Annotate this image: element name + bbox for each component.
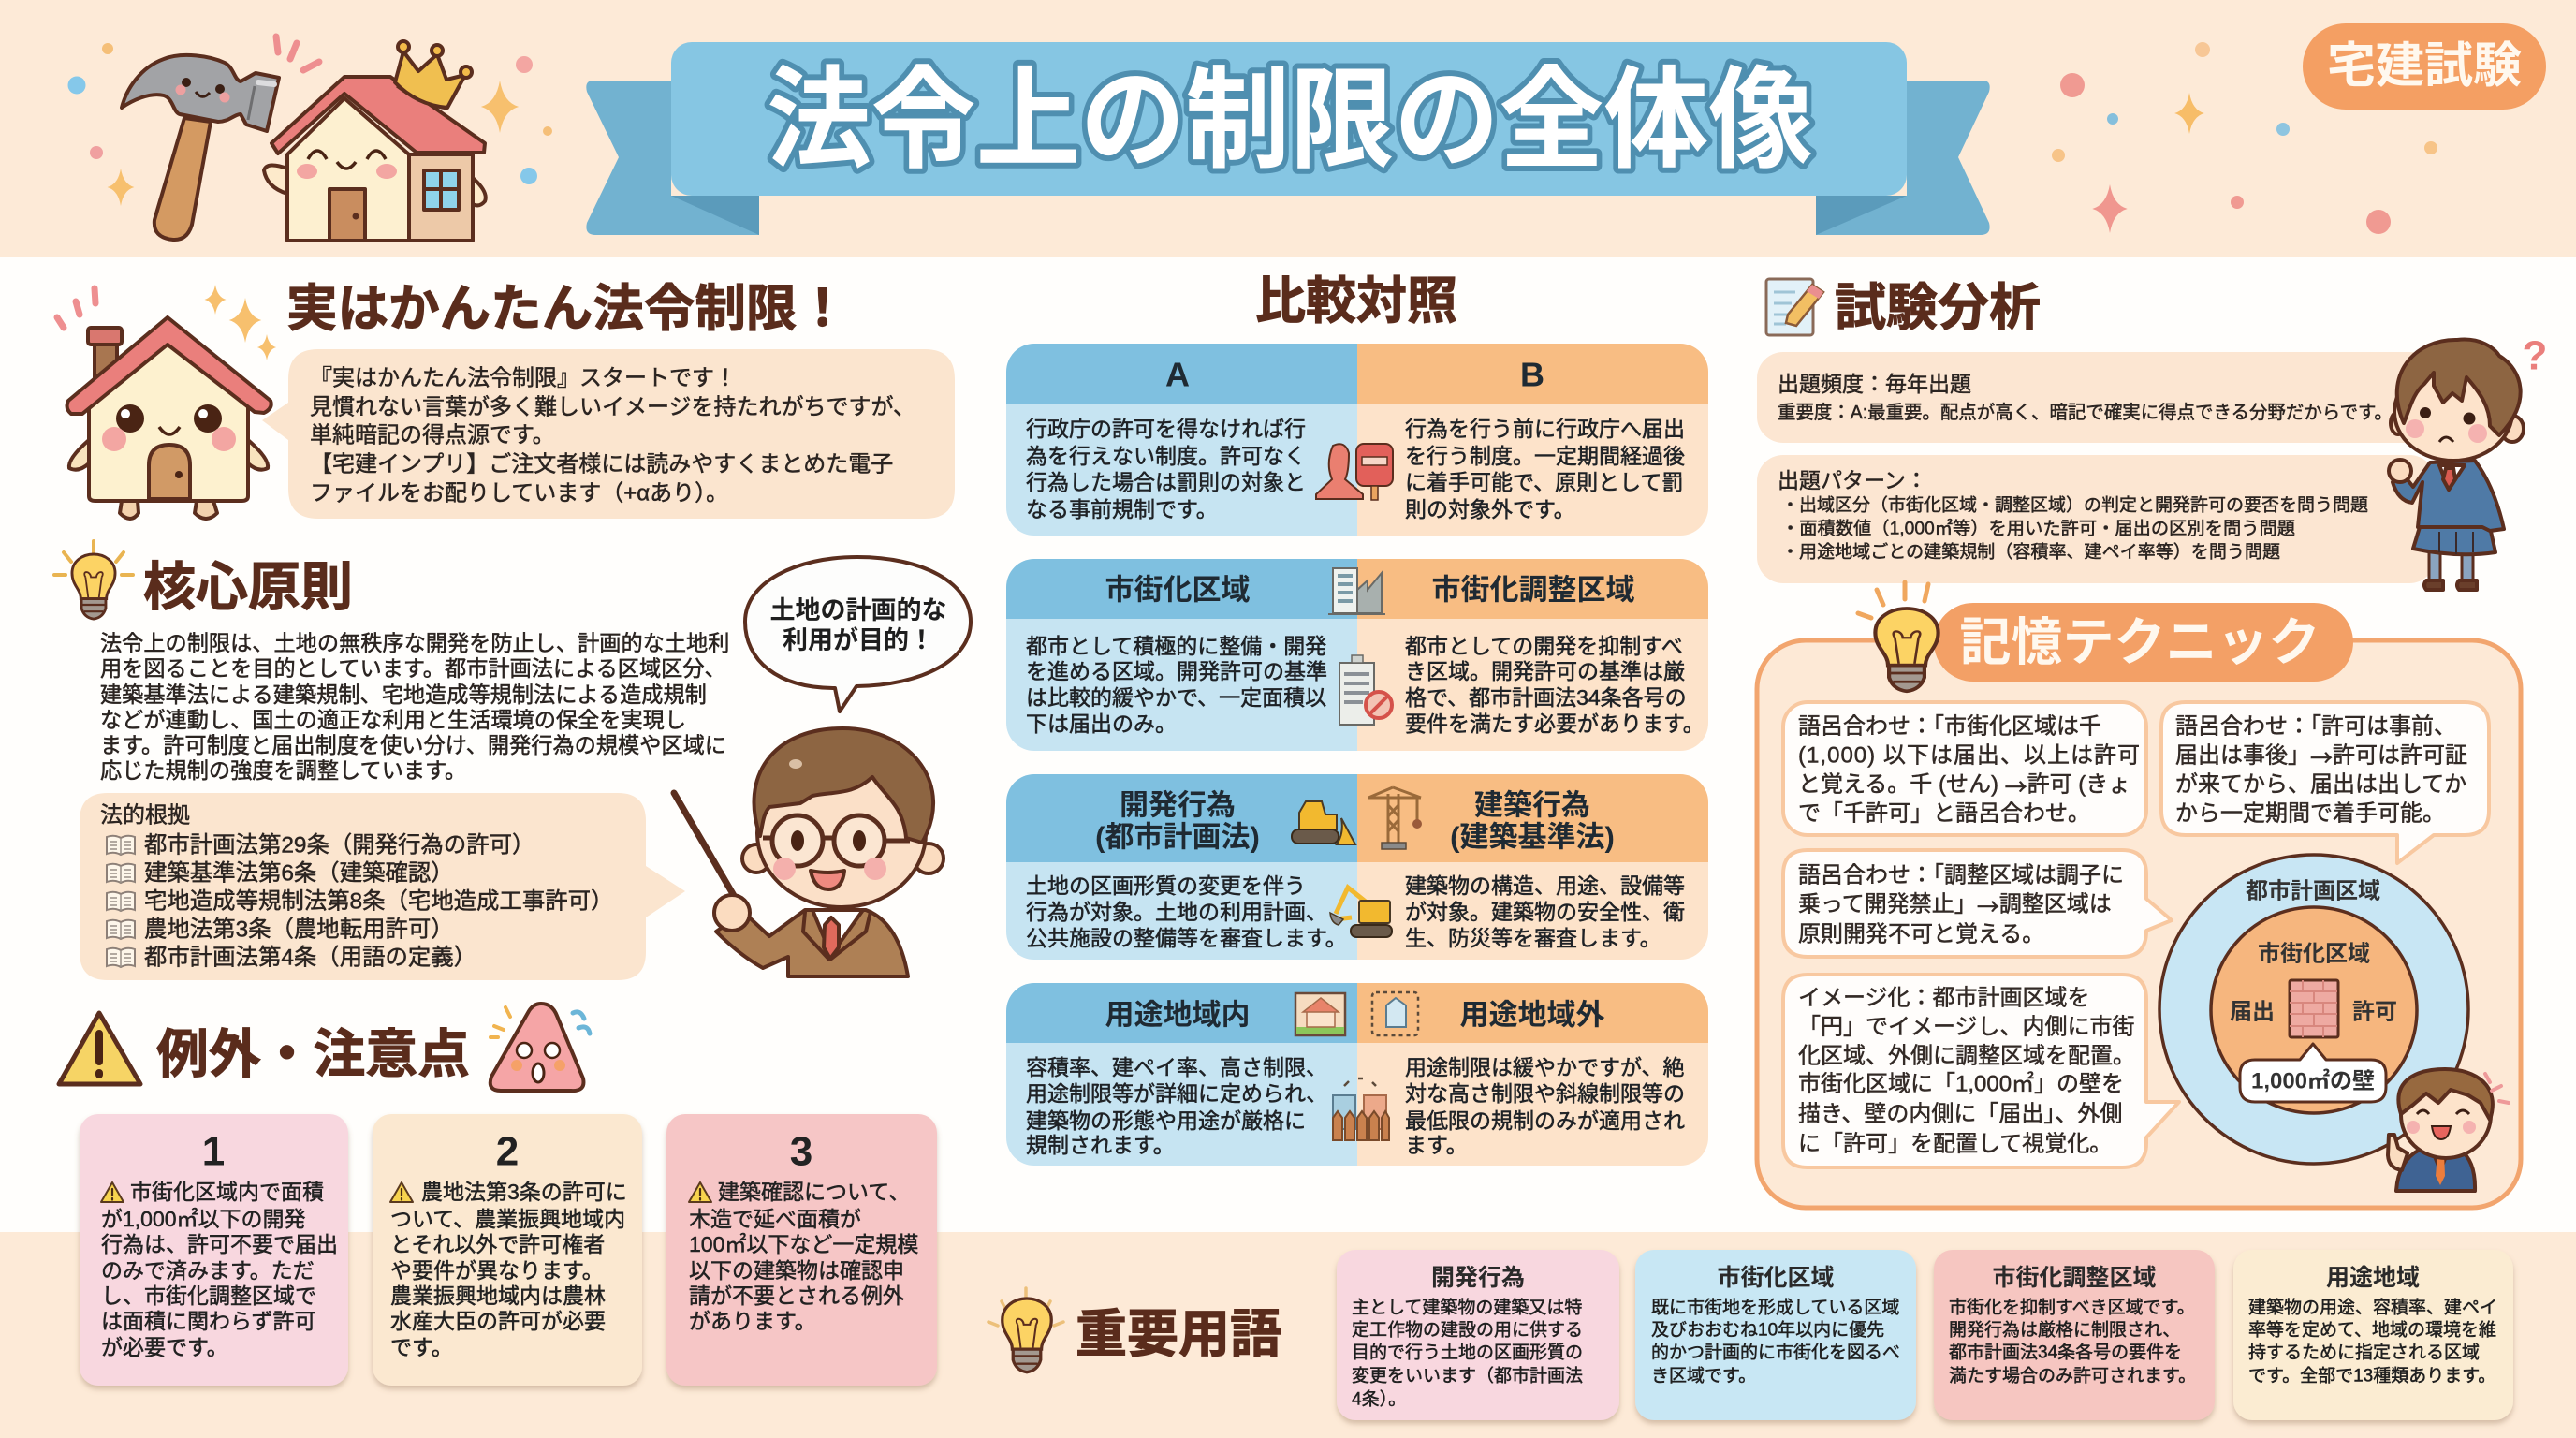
speech bubble: visualization: 市街化区域に「1,000㎡」の壁を	[1798, 1071, 2124, 1097]
question mark: ?	[2523, 333, 2547, 378]
icon: buildings behind fence	[1333, 1078, 1389, 1140]
icon: framed house	[1295, 993, 1345, 1035]
header band	[0, 0, 2576, 257]
illustration: cute hammer	[122, 55, 279, 240]
comparison row: A and B: 則の対象外です。	[1405, 497, 1575, 521]
comparison row: use districts: 対な高さ制限や斜線制限等の	[1405, 1081, 1685, 1106]
comparison row: development and building acts: 生、防災等を審査します。	[1405, 926, 1661, 950]
comparison row: urbanization areas: 要件を満たす必要があります。	[1405, 712, 1705, 736]
illustration: teacher with pointer	[674, 728, 944, 976]
icon: warning triangle	[59, 1013, 140, 1084]
card: use district term: です。全部で13種類あります。	[2248, 1365, 2496, 1386]
card: exception 3: 建築確認について、	[718, 1180, 910, 1204]
card: urbanization control area term: 満たす場合のみ許可されます。	[1949, 1365, 2196, 1386]
speech bubble: mnemonic 2: から一定期間で着手可能。	[2175, 801, 2445, 826]
comparison row: development and building acts: 公共施設の整備等を審査します。	[1026, 926, 1347, 950]
card: urbanization control area term: 都市計画法34条各号の要件を	[1949, 1343, 2182, 1363]
card: development act term: 4条）。	[1352, 1389, 1406, 1410]
icon: glowing bulb	[1858, 582, 1939, 691]
comparison row: development and building acts: 開発行為	[1120, 788, 1236, 822]
decoration: right sparkles	[2052, 42, 2437, 234]
heading: memory techniques banner	[1934, 603, 2353, 682]
heading: core principle: 核心原則	[143, 558, 353, 616]
speech bubble: mnemonic 1: と覚える。千 (せん) →許可 (きょ	[1798, 768, 2130, 801]
icon: light bulb	[54, 541, 133, 619]
section: intro	[57, 281, 955, 519]
comparison row: urbanization areas: 都市としての開発を抑制すべ	[1405, 634, 1683, 658]
card: development act term: 目的で行う土地の区画形質の	[1352, 1343, 1583, 1363]
heading: intro: 実はかんたん法令制限！	[286, 281, 848, 337]
comparison row: urbanization areas	[1006, 559, 1708, 751]
text block: explanation: 建築基準法による建築規制、宅地造成等規制法による造成規制	[100, 682, 707, 707]
comparison row: development and building acts: 土地の区画形質の変更を伴う	[1026, 873, 1306, 898]
card: urbanization control area term: 市街化を抑制すべき区域です。	[1949, 1298, 2195, 1318]
card: use district term: 率等を定めて、地域の環境を維	[2248, 1320, 2496, 1341]
heading: key terms: 重要用語	[1076, 1305, 1281, 1363]
comparison row: development and building acts: (都市計画法)	[1095, 820, 1260, 854]
callout: intro text: 『実はかんたん法令制限』スタートです！	[310, 365, 737, 391]
icon: bulldozer	[1292, 801, 1355, 844]
comparison row: A and B: を行う制度。一定期間経過後	[1405, 444, 1685, 468]
card: development act term: 主として建築物の建築又は特	[1352, 1298, 1582, 1318]
icon: house character	[57, 285, 276, 519]
comparison row: A and B: 行為した場合は罰則の対象と	[1026, 470, 1306, 494]
icon: stamp and mailbox	[1316, 444, 1393, 500]
speech bubble: visualization: 描き、壁の内側に「届出」、外側	[1798, 1101, 2122, 1127]
panel: frequency and importance: 重要度：A:最重要。配点が高く、暗記で確実に得点できる分野だからです。	[1778, 402, 2393, 423]
comparison row: A and B: 行政庁の許可を得なければ行	[1026, 417, 1306, 441]
card: urbanization promotion area term: 既に市街地を形成している区域	[1651, 1298, 1899, 1318]
text block: explanation: 応じた規制の強度を調整しています。	[100, 758, 466, 783]
title text: 法令上の制限の全体像	[767, 59, 1813, 183]
card: use district term	[2233, 1250, 2513, 1420]
card: exception 3: 木造で延べ面積が	[689, 1207, 861, 1231]
card: exception 3	[666, 1114, 937, 1386]
comparison row: urbanization areas: は比較的緩やかで、一定面積以	[1026, 685, 1326, 710]
comparison row: use districts: 建築物の形態や用途が厳格に	[1026, 1108, 1306, 1133]
comparison row: development and building acts: (建築基準法)	[1450, 820, 1615, 854]
text block: explanation: などが連動し、国土の適正な利用と生活環境の保全を実現し	[100, 708, 686, 732]
speech bubble: mnemonic 3: 乗って開発禁止」→調整区域は	[1798, 888, 2112, 921]
card: exception 3: 請が不要とされる例外	[689, 1284, 904, 1308]
label: 1,000 square metre wall	[2240, 1044, 2386, 1102]
comparison row: use districts: ます。	[1405, 1133, 1468, 1157]
comparison row: development and building acts: が対象。建築物の安全性、衛	[1405, 900, 1685, 924]
section: exam analysis	[1757, 279, 2547, 590]
diagram: concentric planning areas	[2159, 855, 2468, 1164]
diagram: concentric planning areas: 都市計画区域	[2246, 878, 2380, 904]
badge: exam name: 宅建試験	[2327, 39, 2522, 94]
comparison row: use districts: 容積率、建ペイ率、高さ制限、	[1026, 1055, 1327, 1079]
card: exception 3: があります。	[689, 1309, 816, 1333]
text block: explanation: 用を図ることを目的としています。都市計画法による区域区分、	[100, 656, 726, 681]
card: use district term: 建築物の用途、容積率、建ペイ	[2248, 1298, 2497, 1318]
callout: legal basis: 都市計画法第29条（開発行為の許可）	[144, 833, 534, 858]
card: urbanization promotion area term: 的かつ計画的に市街化を図るべ	[1651, 1343, 1900, 1363]
card: urbanization control area term: 開発行為は厳格に制限され、	[1949, 1320, 2180, 1341]
comparison row: use districts: 用途制限等が詳細に定められ、	[1026, 1081, 1327, 1106]
icon: building with prohibition sign	[1339, 655, 1392, 725]
speech bubble: visualization: に「許可」を配置して視覚化。	[1798, 1131, 2112, 1157]
card: exception 1: 1	[202, 1129, 225, 1174]
speech bubble: mnemonic 1	[1783, 702, 2146, 835]
callout: intro text: ファイルをお配りしています（+αあり）。	[310, 481, 728, 506]
illustration: house with crown	[264, 41, 486, 241]
speech bubble: mnemonic 2	[2161, 702, 2489, 863]
section: core principle	[54, 541, 971, 980]
speech bubble: mnemonic 3: 原則開発不可と覚える。	[1798, 921, 2044, 947]
card: exception 1: 行為は、許可不要で届出	[101, 1232, 338, 1256]
card: exception 1: が必要です。	[101, 1335, 228, 1359]
comparison row: urbanization areas: 都市として積極的に整備・開発	[1026, 634, 1326, 658]
comparison row: development and building acts: 行為が対象。土地の利用計画、	[1026, 900, 1327, 924]
callout: legal basis: 農地法第3条（農地転用許可）	[144, 917, 454, 942]
card: urbanization control area term: 市街化調整区域	[1992, 1265, 2157, 1291]
panel: frequency and importance	[1757, 352, 2436, 443]
icon: surprised triangle	[490, 1004, 590, 1091]
speech bubble: visualization: 化区域、外側に調整区域を配置。	[1798, 1043, 2135, 1069]
illustration: pointing boy	[2388, 1069, 2509, 1191]
comparison row: A and B: 為を行えない制度。許可なく	[1026, 444, 1306, 468]
comparison row: A and B: A	[1165, 356, 1190, 393]
card: exception 2: です。	[390, 1335, 453, 1359]
comparison row: urbanization areas: 市街化区域	[1105, 573, 1251, 607]
comparison row: urbanization areas: き区域。開発許可の基準は厳	[1405, 659, 1685, 683]
comparison row: use districts: 最低限の規制のみが適用され	[1405, 1108, 1685, 1133]
card: exception 2: 農地法第3条の許可に	[421, 1180, 627, 1204]
card: exception 1: 市街化区域内で面積	[130, 1180, 324, 1204]
callout: legal basis: 都市計画法第4条（用語の定義）	[144, 946, 476, 970]
diagram: concentric planning areas: 市街化区域	[2258, 942, 2370, 966]
icon: tower crane	[1368, 787, 1422, 849]
heading: exam analysis: 試験分析	[1835, 280, 2041, 336]
card: urbanization promotion area term: 及びおおむね10年以内に優先	[1651, 1320, 1884, 1341]
section: memory techniques	[1757, 582, 2521, 1208]
callout: intro text: 見慣れない言葉が多く難しいイメージを持たれがちですが、	[310, 395, 915, 419]
diagram: concentric planning areas: 届出	[2230, 1000, 2275, 1024]
card: exception 2	[373, 1114, 642, 1386]
card: exception 3: 100㎡以下など一定規模	[689, 1232, 918, 1256]
speech bubble: teacher: 利用が目的！	[783, 625, 934, 654]
speech bubble: teacher	[745, 557, 971, 712]
text block: explanation: ます。許可制度と届出制度を使い分け、開発行為の規模や区域に	[100, 733, 726, 757]
section: key terms	[988, 1250, 2513, 1420]
card: development act term	[1337, 1250, 1619, 1420]
comparison row: development and building acts: 建築行為	[1474, 788, 1590, 822]
icon: footer bulb	[988, 1288, 1063, 1372]
card: exception 2: とそれ以外で許可権者	[390, 1232, 605, 1256]
diagram: concentric planning areas: 許可	[2352, 1000, 2397, 1024]
card: development act term: 変更をいいます（都市計画法	[1352, 1365, 1583, 1386]
speech bubble: mnemonic 3	[1783, 850, 2172, 957]
comparison row: development and building acts	[1006, 774, 1708, 960]
panel: frequency and importance: 出題頻度：毎年出題	[1778, 372, 1971, 396]
comparison row: A and B: なる事前規制です。	[1026, 497, 1218, 521]
heading: comparison: 比較対照	[1255, 273, 1457, 330]
panel: question patterns: 出題パターン：	[1778, 468, 1927, 492]
speech bubble: mnemonic 1: (1,000) 以下は届出、以上は許可	[1798, 743, 2140, 768]
callout: legal basis: 宅地造成等規制法第8条（宅地造成工事許可）	[144, 889, 613, 914]
comparison row: use districts	[1006, 983, 1708, 1166]
panel: question patterns: ・面積数値（1,000㎡等）を用いた許可・届出の区別を問う問題	[1781, 517, 2295, 539]
card: exception 2: 水産大臣の許可が必要	[390, 1309, 606, 1333]
card: exception 1	[80, 1114, 348, 1386]
icon: buildings and factory	[1328, 568, 1385, 614]
speech bubble: mnemonic 3: 語呂合わせ：「調整区域は調子に	[1798, 863, 2124, 888]
panel: question patterns: ・出域区分（市街化区域・調整区域）の判定と開発許可の要否を問う問題	[1781, 494, 2368, 515]
card: urbanization promotion area term: き区域です。	[1651, 1365, 1756, 1386]
card: urbanization control area term	[1934, 1250, 2215, 1420]
card: exception 2: 2	[496, 1129, 519, 1174]
callout: legal basis	[80, 793, 685, 980]
card: exception 2: 農業振興地域内は農林	[390, 1284, 606, 1308]
speech bubble: mnemonic 2: 語呂合わせ：「許可は事前、	[2175, 713, 2456, 740]
card: exception 3: 以下の建築物は確認申	[689, 1258, 904, 1283]
speech bubble: mnemonic 2: 届出は事後」→許可は許可証	[2175, 740, 2467, 771]
icon: dashed area with building	[1372, 992, 1418, 1035]
card: exception 2: や要件が異なります。	[390, 1258, 604, 1283]
comparison row: urbanization areas: を進める区域。開発許可の基準	[1026, 659, 1327, 683]
comparison row: urbanization areas: 下は届出のみ。	[1026, 712, 1177, 736]
heading: memory techniques banner: 記憶テクニック	[1959, 613, 2320, 671]
icon: note and pencil	[1766, 279, 1823, 335]
comparison row: A and B: B	[1520, 356, 1544, 393]
speech bubble: visualization: 「円」でイメージし、内側に市街	[1798, 1015, 2135, 1039]
speech bubble: visualization: イメージ化：都市計画区域を	[1798, 985, 2090, 1011]
section: exceptions	[59, 1004, 937, 1386]
card: development act term: 定工作物の建設の用に供する	[1352, 1320, 1583, 1341]
comparison row: urbanization areas: 格で、都市計画法34条各号の	[1405, 685, 1687, 710]
panel: question patterns: ・用途地域ごとの建築規制（容積率、建ペイ率等）を問う問題	[1781, 541, 2280, 562]
footer band	[0, 1232, 2576, 1438]
panel: memory techniques frame	[1757, 640, 2521, 1208]
icon: brick wall	[2290, 980, 2338, 1037]
section: comparison	[1006, 273, 1708, 1166]
callout: legal basis: 建築基準法第6条（建築確認）	[144, 861, 454, 886]
comparison row: A and B	[1006, 344, 1708, 536]
badge: exam name	[2303, 23, 2546, 110]
card: exception 1: は面積に関わらず許可	[101, 1309, 316, 1333]
title ribbon	[586, 42, 1990, 235]
card: exception 2: ついて、農業振興地域内	[390, 1207, 625, 1231]
speech bubble: teacher: 土地の計画的な	[769, 596, 947, 624]
callout: intro text: 【宅建インプリ】ご注文者様には読みやすくまとめた電子	[310, 451, 893, 477]
callout: intro text: 単純暗記の得点源です。	[310, 423, 555, 448]
card: exception 1: し、市街化調整区域で	[101, 1284, 316, 1308]
comparison row: use districts: 用途地域外	[1460, 998, 1604, 1032]
card: exception 3: 3	[790, 1129, 812, 1174]
comparison row: urbanization areas: 市街化調整区域	[1432, 573, 1634, 607]
comparison row: A and B: に着手可能で、原則として罰	[1405, 470, 1683, 494]
callout: legal basis: 法的根拠	[100, 803, 190, 828]
comparison row: A and B: 行為を行う前に行政庁へ届出	[1405, 417, 1685, 441]
card: development act term: 開発行為	[1431, 1265, 1525, 1291]
label: 1,000 square metre wall: 1,000㎡の壁	[2251, 1067, 2375, 1093]
speech bubble: mnemonic 1: で「千許可」と語呂合わせ。	[1798, 801, 2090, 826]
decoration: left sparkles	[67, 37, 552, 206]
heading: exceptions: 例外・注意点	[156, 1024, 470, 1084]
card: use district term: 持するために指定される区域	[2248, 1343, 2480, 1363]
card: urbanization promotion area term	[1635, 1250, 1916, 1420]
card: exception 1: が1,000㎡以下の開発	[101, 1207, 306, 1231]
comparison row: development and building acts: 建築物の構造、用途、設備等	[1405, 873, 1685, 898]
speech bubble: visualization	[1783, 975, 2179, 1167]
callout: intro text	[262, 349, 955, 519]
speech bubble: mnemonic 1: 語呂合わせ：「市街化区域は千	[1798, 713, 2101, 740]
comparison row: use districts: 規制されます。	[1026, 1133, 1175, 1157]
icon: excavator	[1330, 888, 1392, 937]
card: use district term: 用途地域	[2326, 1265, 2420, 1291]
speech bubble: mnemonic 2: が来てから、届出は出してか	[2175, 771, 2466, 798]
comparison row: use districts: 用途地域内	[1105, 998, 1251, 1032]
illustration: confused student	[2389, 333, 2547, 590]
comparison row: use districts: 用途制限は緩やかですが、絶	[1405, 1055, 1685, 1079]
card: urbanization promotion area term: 市街化区域	[1717, 1265, 1835, 1291]
card: exception 1: のみで済みます。ただ	[101, 1258, 315, 1283]
panel: question patterns	[1757, 455, 2436, 583]
text block: explanation: 法令上の制限は、土地の無秩序な開発を防止し、計画的な土地利	[100, 631, 729, 655]
text block: explanation	[100, 631, 729, 783]
